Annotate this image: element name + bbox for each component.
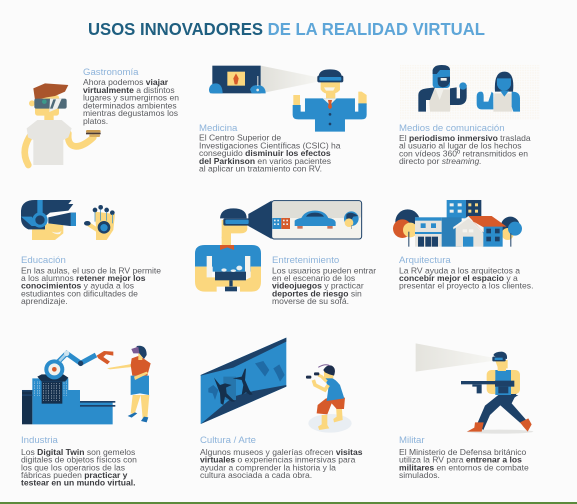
title: USOS INNOVADORES DE LA REALIDAD VIRTUAL [88,19,485,39]
text: gastronomia: platos. [83,116,108,126]
icon: gastronomy man with headset [25,83,101,165]
text: industria: Los Digital Twin son gemelos [21,447,135,457]
text: gastronomia: virtualmente a distintos [83,85,175,95]
text: educacion: En las aulas, el uso de la RV permite [21,266,161,276]
text: arquitectura: concebir mejor el espacio y a [399,273,518,283]
text: industria: digitales de objetos físicos con [21,454,137,464]
text: arquitectura [399,255,533,291]
text: entretenimiento: Entretenimiento [272,255,339,266]
text: medios de comunicacion: directo por streaming. [399,156,482,166]
text: medicina: del Parkinson en varios pacientes [199,156,331,166]
icon: architecture houses [393,200,522,247]
text: industria [21,435,137,488]
icon: education headset and glove [21,200,115,240]
text: arquitectura: La RV ayuda a los arquitectos a [399,266,520,276]
text: gastronomia: mientras degustamos los [83,108,178,118]
icon: entertainment man with projected car [195,201,362,292]
text: educacion: Educación [21,255,66,266]
text: medios de comunicacion: Medios de comunicación [399,123,505,134]
text: industria: los que los operarios de las [21,462,125,472]
text: militar: Militar [399,435,425,446]
text: medios de comunicacion: con vídeos 360º retransmitidos en [399,148,528,158]
text: cultura / arte: virtuales o experiencias inmersivas para [200,454,356,464]
text: entretenimiento: Los usuarios pueden entrar [272,266,376,276]
text: medicina: conseguido disminuir los efectos [199,148,331,158]
text: educacion [21,255,161,306]
text: militar [399,435,529,480]
text: medicina: Investigaciones Científicas (CSIC) ha [199,140,341,150]
text: entretenimiento: deportes de riesgo sin [272,288,362,298]
text: medicina: al aplicar un tratamiento con RV. [199,164,322,174]
icon: medicine doctor and screen [209,66,367,132]
text: cultura / arte [200,435,363,480]
text: gastronomia: lugares y sumergirnos en [83,92,179,102]
text: cultura / arte: Algunos museos y galerías ofrecen visitas [200,447,363,457]
icon: military soldier with rifle [416,343,533,434]
text: gastronomia: Gastronomía [83,67,139,78]
text: arquitectura: Arquitectura [399,255,451,266]
text: medicina [199,123,341,174]
text: cultura / arte: cultura asociada a cada obra. [200,470,312,480]
text: militar: utiliza la RV para entrenar a los [399,454,522,464]
icon: media reporters [400,65,540,120]
text: educacion: a los alumnos retener mejor los [21,273,146,283]
text: militar: simulados. [399,470,440,480]
text: medios de comunicacion: al usuario al lugar de los hechos [399,140,522,150]
text: industria: fábricas pueden practicar y [21,470,128,480]
text: cultura / arte: ayudar a comprender la historia y la [200,462,336,472]
text: industria: Industria [21,435,58,446]
text: industria: testear en un mundo virtual. [21,478,135,488]
text: medicina: Medicina [199,123,238,134]
text: entretenimiento [272,255,376,306]
text: entretenimiento: moverse de su sofá. [272,296,349,306]
text: medios de comunicacion: El periodismo inmersivo traslada [399,133,531,143]
text: medicina: El Centro Superior de [199,132,281,142]
text: cultura / arte: Cultura / Arte [200,435,256,446]
text: entretenimiento: en el escenario de los [272,273,355,283]
text: educacion: estudiantes con dificultades de [21,288,138,298]
text: medios de comunicacion [399,123,531,166]
text: militar: militares en entornos de combate [399,462,529,472]
text: gastronomia: determinados ambientes [83,100,177,110]
text: educacion: aprendizaje. [21,296,68,306]
icon: industry robot arm and woman [22,346,151,424]
text: educacion: conocimientos y ayuda a los [21,281,134,291]
icon: culture gallery and visitor [201,338,352,433]
text: gastronomia: Ahora podemos viajar [83,77,169,87]
text: militar: El Ministerio de Defensa británico [399,447,527,457]
text: gastronomia [83,67,179,126]
text: entretenimiento: videojuegos y practicar [272,281,364,291]
text: arquitectura: presentar el proyecto a los clientes. [399,281,533,291]
